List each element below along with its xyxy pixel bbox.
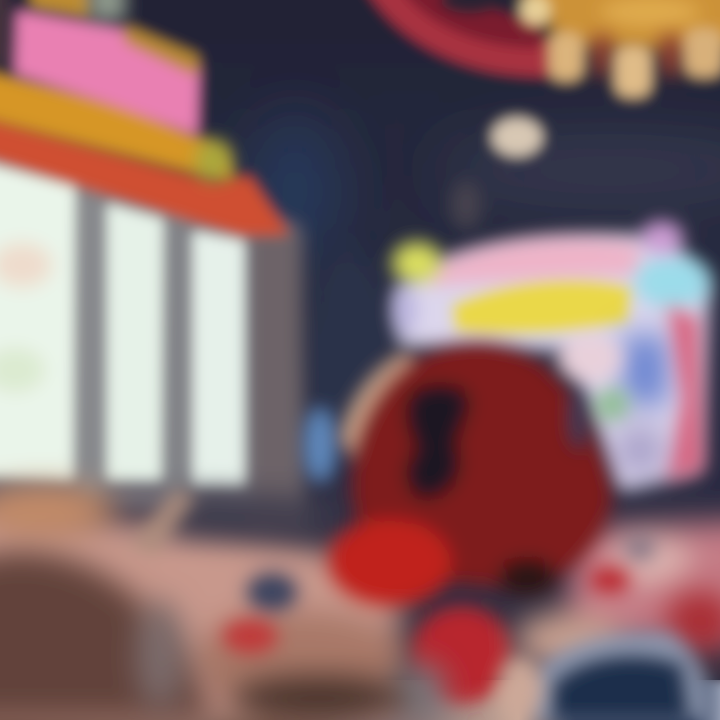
floor: pink and tan ground (0, 500, 720, 720)
hanging lamp (452, 181, 480, 229)
decoration: golden chandelier (510, 0, 720, 98)
storefront wall and columns (0, 140, 305, 525)
ceiling light (491, 117, 543, 157)
pale patch (558, 334, 622, 382)
foreground: navy object at bottom right (394, 632, 707, 720)
body (352, 342, 612, 586)
pink arch (430, 239, 640, 285)
purple tip (642, 222, 682, 254)
awning: red band (0, 110, 290, 236)
foreground: brown blurred figure at bottom left (0, 484, 210, 720)
sign: gold trim (30, 0, 90, 18)
pale arm (340, 350, 420, 465)
windows (0, 155, 245, 485)
base: dark strip under storefront (170, 492, 335, 535)
panel: storefront on the left (0, 0, 305, 525)
awning: yellow band (0, 65, 235, 180)
dark foot (500, 560, 556, 596)
blue patches (622, 335, 668, 405)
foreground: small toys on the floor (222, 534, 720, 703)
cyan corner (634, 256, 710, 308)
lime corner (393, 243, 441, 283)
sign: pink panel (14, 10, 200, 136)
side shadow (568, 390, 588, 450)
backdrop: bottom colour band (0, 680, 720, 720)
lavender left side (393, 286, 417, 334)
lower body (328, 518, 452, 606)
panel: rainbow arcade sign (393, 222, 710, 490)
dark face mark (408, 386, 468, 498)
decoration: red arc at the top (362, 0, 550, 76)
sign backing (398, 237, 708, 490)
green patch (594, 387, 630, 423)
lower blue patch (614, 424, 666, 476)
glow: blue side light (304, 407, 336, 483)
foreground: dark shadow at the bottom (230, 676, 410, 720)
yellow band (452, 281, 632, 333)
pink ribbon (665, 305, 702, 480)
character: red round figure (328, 342, 612, 606)
